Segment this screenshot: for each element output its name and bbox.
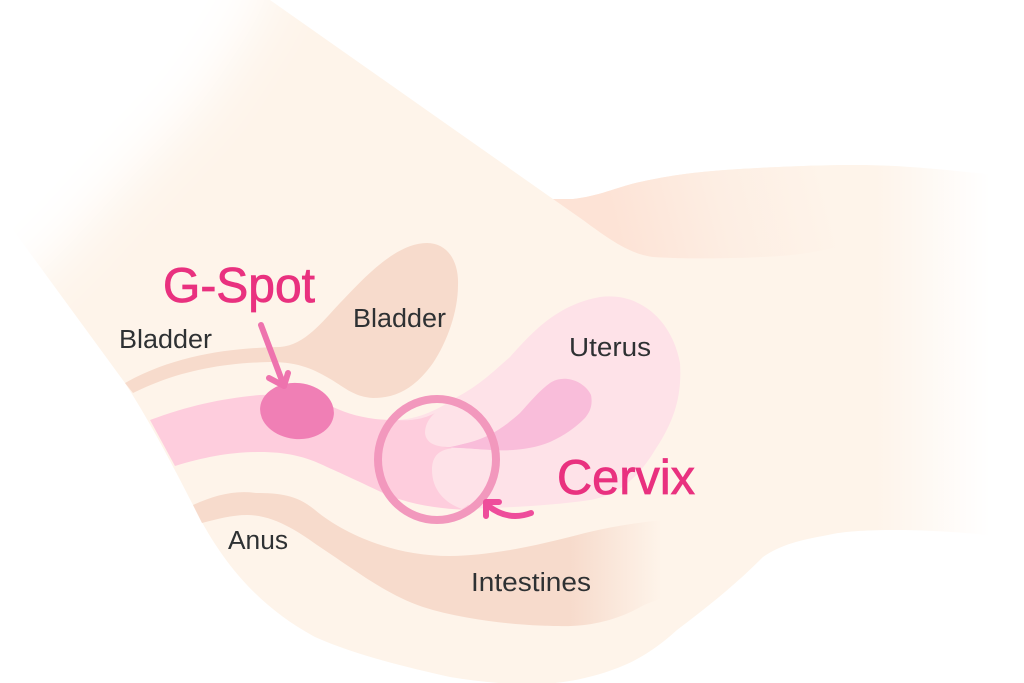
- label: Anus: Anus: [228, 527, 288, 555]
- shape: intestines and anus band: [193, 492, 662, 626]
- label: Bladder left: Bladder: [119, 326, 213, 354]
- shape: uterine cavity: [443, 379, 592, 450]
- shape: vaginal canal: [150, 395, 470, 510]
- shape: hip fold: [553, 165, 860, 258]
- label: Bladder organ: Bladder: [353, 305, 447, 333]
- icon: cervix highlight circle: [378, 399, 496, 520]
- label: Intestines: Intestines: [471, 569, 591, 597]
- shape: bladder: [125, 243, 458, 398]
- icon: g-spot marker: [257, 379, 337, 443]
- label: Uterus: Uterus: [569, 334, 651, 362]
- arrow: g-spot pointer: [261, 325, 288, 386]
- shape: uterus: [393, 296, 680, 509]
- shape: cervix lobes: [425, 404, 493, 509]
- arrow: cervix pointer: [486, 502, 531, 516]
- heading: G-Spot: G-Spot: [163, 259, 315, 313]
- heading: Cervix: Cervix: [557, 451, 695, 505]
